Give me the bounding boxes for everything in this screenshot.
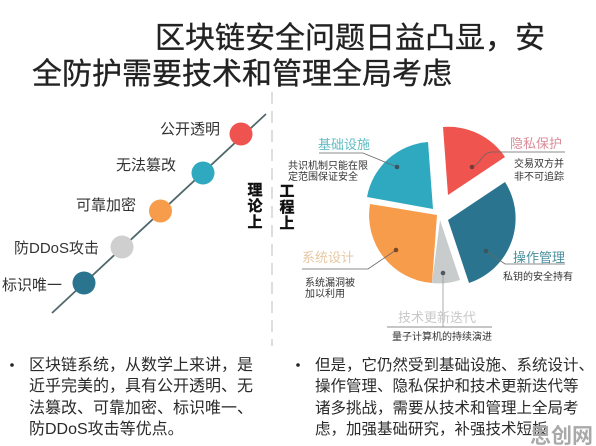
text block: theory summary: 近乎完美的，具有公开透明、无 (29, 377, 253, 395)
callout: technology iteration: 技术更新迭代 (398, 310, 476, 325)
marker: tamper proof: 无法篡改 (116, 157, 176, 174)
slice: system design (369, 204, 437, 283)
callout: privacy: 隐私保护 (510, 136, 562, 151)
heading: in theory (247, 182, 263, 231)
callout: infrastructure: 共识机制只能在限 (288, 159, 368, 172)
slice: technology iteration (432, 220, 460, 283)
callout: privacy: 非不可追踪 (514, 170, 564, 183)
callout: infrastructure (288, 137, 399, 183)
heading: in theory: 理 (247, 182, 263, 199)
title: 区块链安全问题日益凸显，安 (155, 22, 545, 55)
title: 全防护需要技术和管理全局考虑 (32, 58, 452, 91)
text block: theory summary (10, 356, 253, 438)
marker: reliable encryption (76, 197, 172, 222)
text block: engineering summary: 诸多挑战，需要从技术和管理上全局考 (315, 399, 579, 417)
callout: system design: 系统漏洞被 (305, 276, 355, 289)
text block: engineering summary: 虑，加强基础研究，补强技术短板 (315, 420, 548, 438)
marker: anti DDoS (14, 236, 134, 258)
heading: in theory: 上 (247, 214, 263, 231)
callout: technology iteration: 量子计算机的持续演进 (392, 330, 492, 343)
marker: public transparency: 公开透明 (160, 121, 220, 138)
marker: tamper proof (116, 157, 214, 184)
text block: theory summary: 法篡改、可靠加密、标识唯一、 (29, 398, 253, 417)
callout: operations (484, 249, 573, 283)
callout: infrastructure: 定范围保证安全 (288, 170, 358, 183)
pie chart (367, 127, 516, 283)
callout: system design: 加以利用 (305, 288, 345, 300)
text block: engineering summary: 但是，它仍然受到基础设施、系统设计、 (315, 356, 594, 374)
heading: in engineering: 工 (279, 183, 295, 200)
callout: system design: 系统设计 (302, 250, 354, 265)
callout: infrastructure: 基础设施 (318, 137, 370, 152)
slice: operations (448, 182, 516, 283)
text block: engineering summary (296, 356, 594, 438)
heading: in engineering: 上 (279, 215, 295, 232)
slice: privacy (443, 127, 505, 195)
marker: public transparency (160, 121, 252, 146)
slice: infrastructure (367, 142, 433, 209)
callout: operations: 私钥的安全持有 (503, 270, 573, 283)
callout: technology iteration (387, 271, 492, 343)
marker: unique identity (2, 272, 96, 294)
callout: operations: 操作管理 (513, 250, 565, 265)
heading: in theory: 论 (247, 197, 263, 215)
text block: engineering summary: 操作管理、隐私保护和技术更新迭代等 (315, 377, 579, 395)
callout: system design (302, 248, 398, 300)
marker: unique identity: 标识唯一 (2, 277, 62, 294)
text block: theory summary: 区块链系统，从数学上来讲，是 (29, 356, 253, 374)
heading: in engineering (279, 183, 295, 232)
text block: theory summary: 防DDoS攻击等优点。 (29, 420, 184, 438)
callout: privacy: 交易双方并 (514, 157, 564, 170)
title (32, 22, 545, 91)
heading: in engineering: 程 (279, 199, 295, 216)
marker: anti DDoS: 防DDoS攻击 (14, 240, 99, 257)
marker: reliable encryption: 可靠加密 (76, 197, 136, 214)
callout: privacy (470, 136, 565, 183)
panel: theory timeline (2, 114, 266, 313)
